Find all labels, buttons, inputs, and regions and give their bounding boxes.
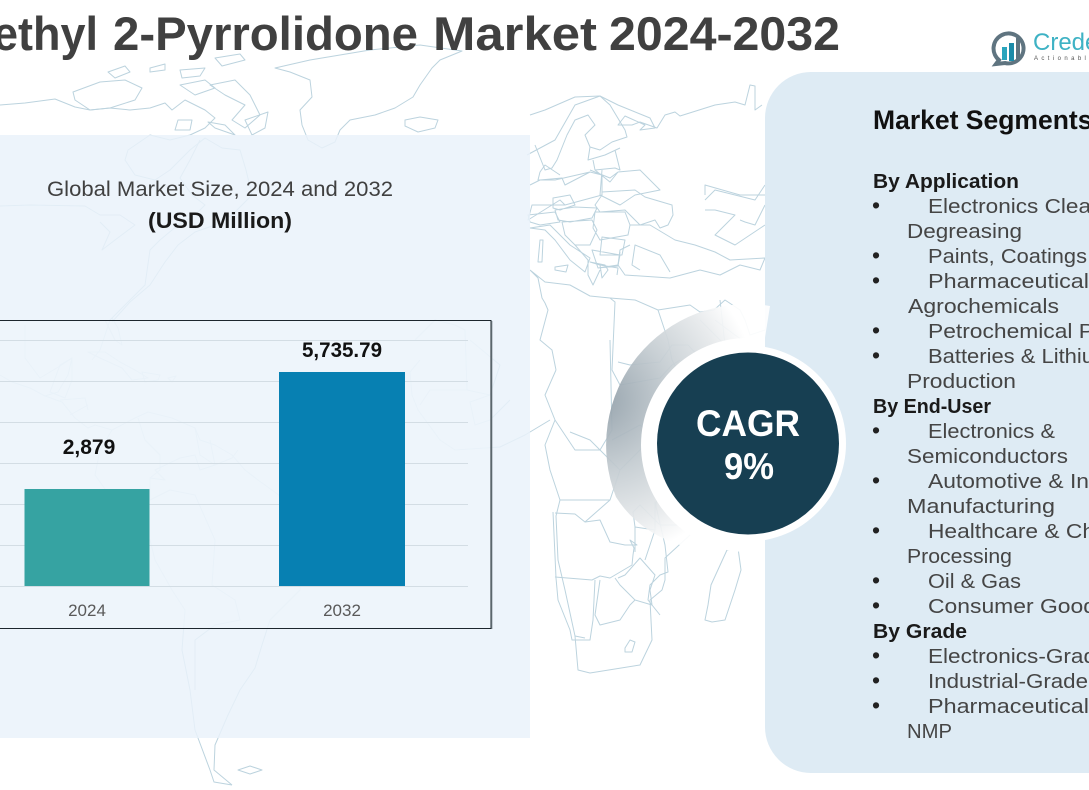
title: 2024-2032 [609, 7, 840, 60]
segment list: • [872, 592, 880, 618]
title: 2-Pyrrolidone [113, 7, 418, 60]
segment list: Petrochemical P [928, 320, 1089, 343]
segment list: Manufacturing [907, 495, 1055, 518]
CAGR value: 9% [724, 446, 774, 487]
bar chart [0, 320, 492, 629]
segment list: Electronics Clea [928, 195, 1089, 218]
segment list: Healthcare & Ch [928, 520, 1089, 543]
segment list: • [872, 567, 880, 593]
chart title: Global Market Size, 2024 and 2032 [47, 178, 393, 201]
segment list: Agrochemicals [908, 295, 1059, 318]
bar: 2032 [279, 372, 405, 586]
segment list: • [872, 692, 880, 718]
segment list: Consumer Good [928, 595, 1089, 618]
segment list: Degreasing [907, 220, 1022, 243]
bar: 2024 [24, 489, 150, 586]
segment list: Automotive & In [928, 470, 1089, 493]
segment list: Pharmaceutical [928, 270, 1089, 293]
segment list: By Grade [873, 621, 967, 643]
value: 2032: 5,735.79 [302, 339, 382, 362]
segment list: Processing [907, 545, 1012, 568]
segment list: Paints, Coatings [928, 245, 1087, 268]
segment list: • [872, 417, 880, 443]
segment list: • [872, 667, 880, 693]
CAGR badge [606, 304, 855, 552]
segment list: By End-User [873, 396, 991, 418]
segment list: NMP [907, 720, 952, 743]
segment list: • [872, 467, 880, 493]
segment list: • [872, 267, 880, 293]
axis label: 2024: 2024 [68, 601, 106, 620]
segment list: Batteries & Lithiu [928, 345, 1089, 368]
chart unit: (USD Million) [148, 208, 292, 233]
decorative gradient crescent [606, 304, 770, 548]
segment list: Electronics-Grad [928, 645, 1089, 668]
segment list: • [872, 642, 880, 668]
segment list: • [872, 317, 880, 343]
world map outline [0, 45, 765, 785]
title: Market [433, 7, 597, 60]
segment list: • [872, 342, 880, 368]
segment list [872, 171, 1089, 743]
value: 2024: 2,879 [63, 436, 115, 459]
segment list: Production [907, 370, 1016, 393]
chart heading [47, 178, 393, 233]
panel: market segments [765, 72, 1089, 773]
segment list: By Application [873, 171, 1019, 193]
panel: market size background [0, 135, 530, 738]
segments heading: Market Segments [873, 105, 1089, 135]
axis label: 2032: 2032 [323, 601, 361, 620]
CAGR label: CAGR [696, 403, 800, 444]
title [0, 7, 840, 60]
segment list: Semiconductors [907, 445, 1068, 468]
segment list: Pharmaceutical [928, 695, 1089, 718]
segment list: Electronics & [928, 420, 1055, 443]
icon: logo mark [994, 33, 1024, 64]
segment list: • [872, 192, 880, 218]
segment list: Oil & Gas [928, 570, 1021, 593]
segment list: • [872, 242, 880, 268]
segment list: Industrial-Grade [928, 670, 1088, 693]
segment list: • [872, 517, 880, 543]
